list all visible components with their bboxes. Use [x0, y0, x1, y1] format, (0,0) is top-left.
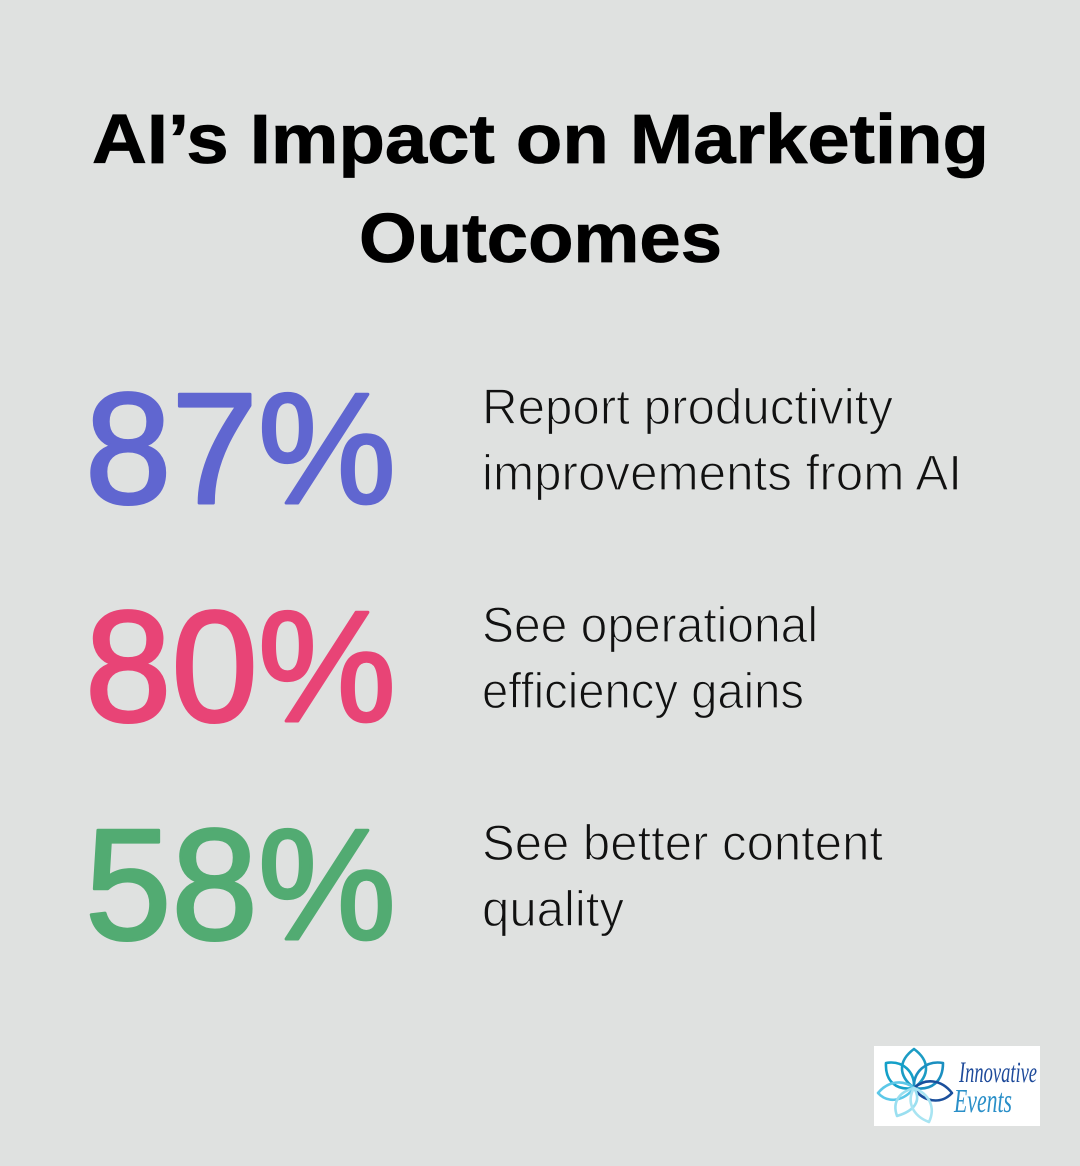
stat label: efficiency: efficiency gains: [482, 663, 804, 719]
title: Outcomes: [359, 199, 722, 277]
logo wordmark: [953, 1056, 1037, 1120]
stat label: efficiency: See operational: [482, 597, 818, 653]
logo: Innovative Events: [874, 1046, 1040, 1126]
stat label: content quality: [482, 815, 883, 937]
title: [92, 100, 989, 277]
stat number: 87%: 87%: [85, 361, 396, 537]
stat label: efficiency: [482, 597, 818, 719]
stat number: 80%: 80%: [85, 579, 396, 755]
stat label: content quality: quality: [482, 881, 624, 937]
logo wordmark: Events: [953, 1083, 1012, 1120]
stat row: efficiency: [85, 579, 818, 755]
stat label: productivity: improvements from AI: [482, 445, 962, 501]
icon: lotus flower: [878, 1049, 952, 1122]
stat label: productivity: [482, 379, 962, 501]
title: AI’s Impact on Marketing: [92, 100, 989, 178]
stat label: productivity: Report productivity: [482, 379, 893, 435]
stat row: content quality: [85, 797, 883, 973]
stat row: productivity: [85, 361, 962, 537]
stat label: content quality: See better content: [482, 815, 883, 871]
stat number: 58%: 58%: [85, 797, 396, 973]
